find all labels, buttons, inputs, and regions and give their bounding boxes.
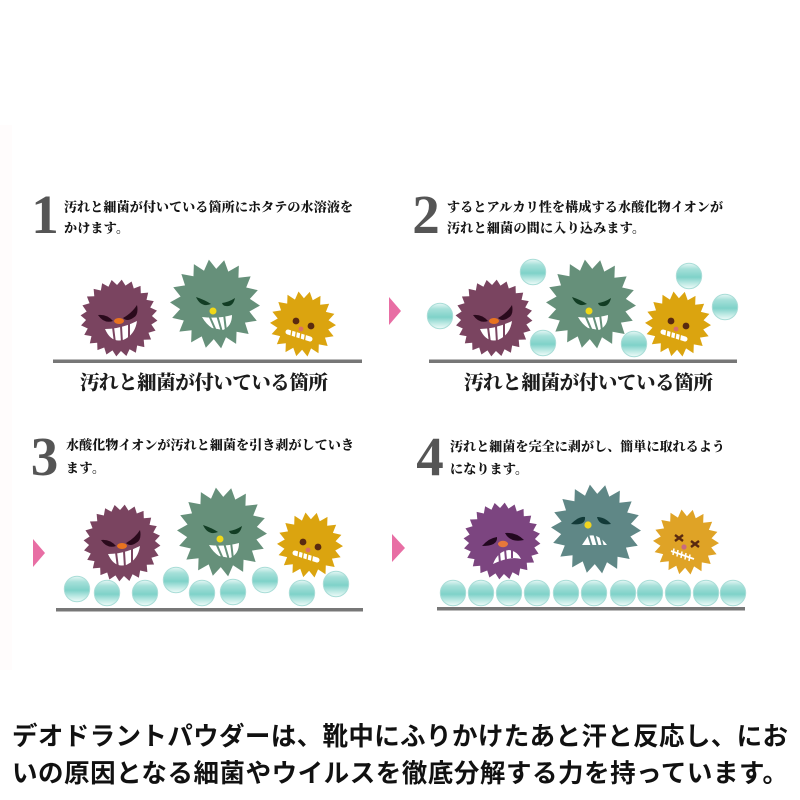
green germ <box>175 486 269 578</box>
step 1 description: 汚れと細菌が付いている箇所にホタテの水溶液を <box>64 200 353 214</box>
surface line <box>429 360 737 363</box>
purple germ <box>453 277 535 359</box>
step 3 description: 水酸化物イオンが汚れと細菌を引き剥がしていき <box>66 438 354 452</box>
numeral 4: 4 <box>416 426 444 487</box>
surface caption: 汚れと細菌が付いている箇所 <box>80 371 328 394</box>
footer text <box>12 722 788 788</box>
surface line <box>56 608 363 612</box>
step 2 description: するとアルカリ性を構成する水酸化物イオンが <box>447 200 723 214</box>
panel: step 4 <box>392 426 746 610</box>
surface line <box>437 607 745 610</box>
arrow: step 2 to 3 <box>33 539 45 567</box>
yellow germ <box>276 512 344 578</box>
step 4 description: になります。 <box>450 462 528 476</box>
purple germ, defeated <box>461 500 543 582</box>
step 1 description: かけます。 <box>64 220 129 236</box>
arrow: step 1 to 2 <box>389 297 401 325</box>
panel: step 1 <box>31 184 362 394</box>
panel: step 3 <box>31 426 363 612</box>
purple germ <box>81 502 163 584</box>
panel: step 2 <box>412 184 738 394</box>
step 3 description <box>66 438 354 476</box>
hydroxide ion bubbles <box>64 567 349 606</box>
green germ, defeated <box>549 483 643 575</box>
step 3 description: ます。 <box>66 460 105 476</box>
footer text: デオドラントパウダーは、靴中にふりかけたあと汗と反応し、にお <box>12 722 788 751</box>
numeral 2: 2 <box>412 184 440 245</box>
surface line <box>53 360 362 363</box>
yellow germ, defeated <box>652 509 720 575</box>
step 2 description <box>447 200 723 236</box>
step 4 description <box>450 439 725 476</box>
step 2 description: 汚れと細菌の間に入り込みます。 <box>447 220 645 236</box>
yellow germ <box>269 291 337 357</box>
green germ <box>168 258 262 350</box>
green germ <box>544 258 638 350</box>
hydroxide ion bubbles <box>427 259 738 357</box>
footer text: いの原因となる細菌やウイルスを徹底分解する力を持っています。 <box>12 760 788 788</box>
yellow germ <box>644 291 712 357</box>
numeral 3: 3 <box>31 426 58 487</box>
arrow: step 3 to 4 <box>392 534 405 562</box>
step 1 description <box>64 200 353 236</box>
purple germ <box>78 277 160 359</box>
numeral 1: 1 <box>31 184 59 245</box>
step 4 description: 汚れと細菌を完全に剥がし、簡単に取れるよう <box>450 439 725 454</box>
row of hydroxide ion bubbles <box>440 580 746 606</box>
surface caption: 汚れと細菌が付いている箇所 <box>464 371 713 394</box>
